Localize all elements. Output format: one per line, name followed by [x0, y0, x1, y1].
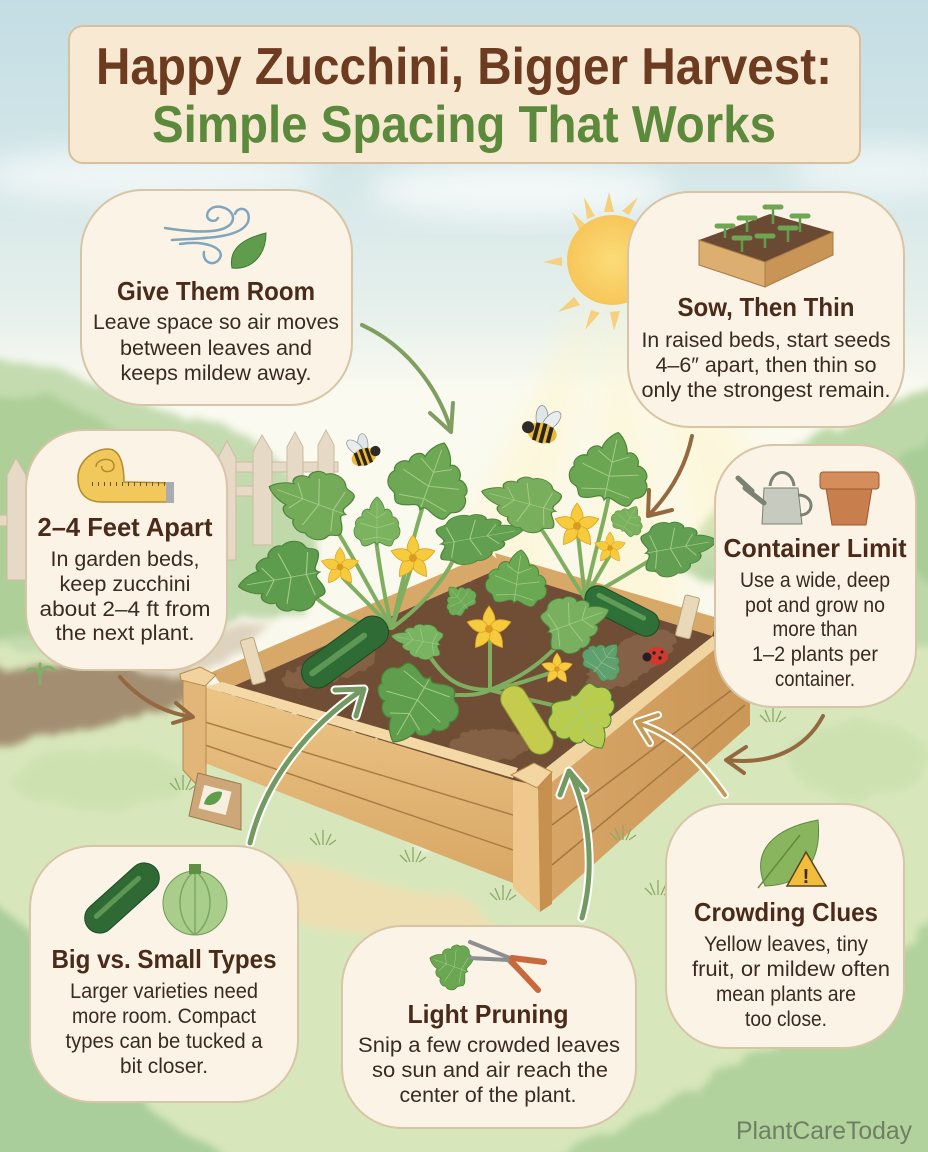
body text: so sun and air reach the — [372, 1059, 608, 1082]
panel: crowding clues — [666, 804, 904, 1048]
title banner — [69, 26, 860, 163]
body text: fruit, or mildew often — [692, 958, 890, 981]
icon: seedling tray — [699, 205, 833, 287]
body text: Leave space so air moves — [93, 311, 339, 334]
body text — [93, 311, 339, 385]
bed: front face — [205, 687, 513, 883]
body text: mean plants are — [716, 983, 856, 1006]
body text: Larger varieties need — [70, 980, 258, 1003]
body text: In garden beds, — [50, 548, 200, 571]
body text: container. — [775, 668, 855, 691]
icon: round zucchini — [163, 864, 227, 935]
body text: 1–2 plants per — [752, 643, 878, 666]
body text: more room. Compact — [72, 1005, 256, 1028]
panel: light pruning — [342, 926, 636, 1128]
icon: yellowing leaf with warning: ! — [803, 866, 809, 888]
arrow: crowding clues to plant — [637, 715, 725, 795]
icon: yellowing leaf with warning — [758, 820, 826, 888]
arrow: big vs small types to plant — [250, 689, 364, 843]
plant markers — [240, 595, 700, 685]
body text — [66, 980, 263, 1078]
bed: back rims — [212, 553, 718, 690]
body text — [642, 329, 890, 402]
brand watermark: PlantCareToday — [736, 1117, 912, 1145]
body text: the next plant. — [56, 622, 194, 645]
heading: 2–4 Feet Apart — [38, 512, 213, 542]
body text — [692, 933, 890, 1031]
body text: too close. — [745, 1008, 827, 1031]
picket fence — [0, 430, 338, 580]
icon: measuring tape — [78, 449, 174, 503]
body text: keeps mildew away. — [120, 362, 312, 385]
arrow: light pruning to plant — [560, 771, 589, 918]
zucchini flowers — [320, 503, 627, 685]
bed: side face — [548, 640, 750, 905]
bees — [342, 400, 566, 470]
grass tufts — [170, 707, 786, 900]
bed: left post — [183, 678, 206, 795]
body text — [740, 569, 890, 691]
panel: big vs small types — [30, 846, 298, 1102]
heading: Give Them Room — [117, 276, 315, 306]
body text: types can be tucked a — [66, 1030, 263, 1053]
body text: 4–6″ apart, then thin so — [656, 354, 876, 377]
arrow: container to bed — [726, 716, 823, 773]
body text: Yellow leaves, tiny — [704, 933, 868, 956]
body text: about 2–4 ft from — [40, 598, 210, 621]
body text — [358, 1034, 620, 1107]
plant stems — [300, 490, 660, 710]
seed packet — [189, 773, 241, 830]
icon: leaf and pruners — [422, 936, 545, 994]
bed: soil — [215, 566, 735, 790]
body text: Snip a few crowded leaves — [358, 1034, 620, 1057]
icon: long zucchini — [79, 857, 165, 939]
heading: Light Pruning — [408, 999, 568, 1029]
raised garden bed — [180, 553, 750, 912]
body text: more than — [772, 618, 858, 641]
panel: sow then thin — [628, 192, 904, 427]
icon: terracotta pot — [820, 472, 879, 525]
heading: Sow, Then Thin — [678, 292, 854, 322]
heading: Big vs. Small Types — [52, 944, 276, 974]
body text: In raised beds, start seeds — [642, 329, 890, 352]
title line 1: Happy Zucchini, Bigger Harvest: — [96, 38, 832, 96]
body text: pot and grow no — [745, 594, 885, 617]
icon: wind and leaf — [165, 207, 266, 268]
panel: give them room — [81, 190, 352, 405]
panel: 2-4 feet apart — [26, 430, 227, 670]
sun with light rays — [420, 192, 790, 620]
heading: Crowding Clues — [694, 897, 878, 927]
arrow: feet apart to bed — [120, 677, 193, 723]
body text — [40, 548, 210, 645]
heading: Container Limit — [724, 533, 907, 563]
body text: only the strongest remain. — [642, 379, 890, 402]
body text: Use a wide, deep — [740, 569, 890, 592]
title line 2: Simple Spacing That Works — [152, 96, 776, 154]
ladybug — [642, 647, 668, 665]
zucchini leaves — [232, 424, 722, 766]
body text: center of the plant. — [400, 1084, 576, 1107]
bed: front post — [513, 780, 540, 912]
arrow: give them room to plant — [362, 325, 453, 432]
zucchini — [295, 581, 664, 759]
arrow: sow to plant — [648, 436, 692, 516]
icon: watering can — [738, 472, 811, 524]
panel: container limit — [715, 445, 916, 707]
body text: bit closer. — [120, 1055, 208, 1078]
body text: between leaves and — [120, 337, 312, 360]
body text: keep zucchini — [60, 573, 190, 596]
